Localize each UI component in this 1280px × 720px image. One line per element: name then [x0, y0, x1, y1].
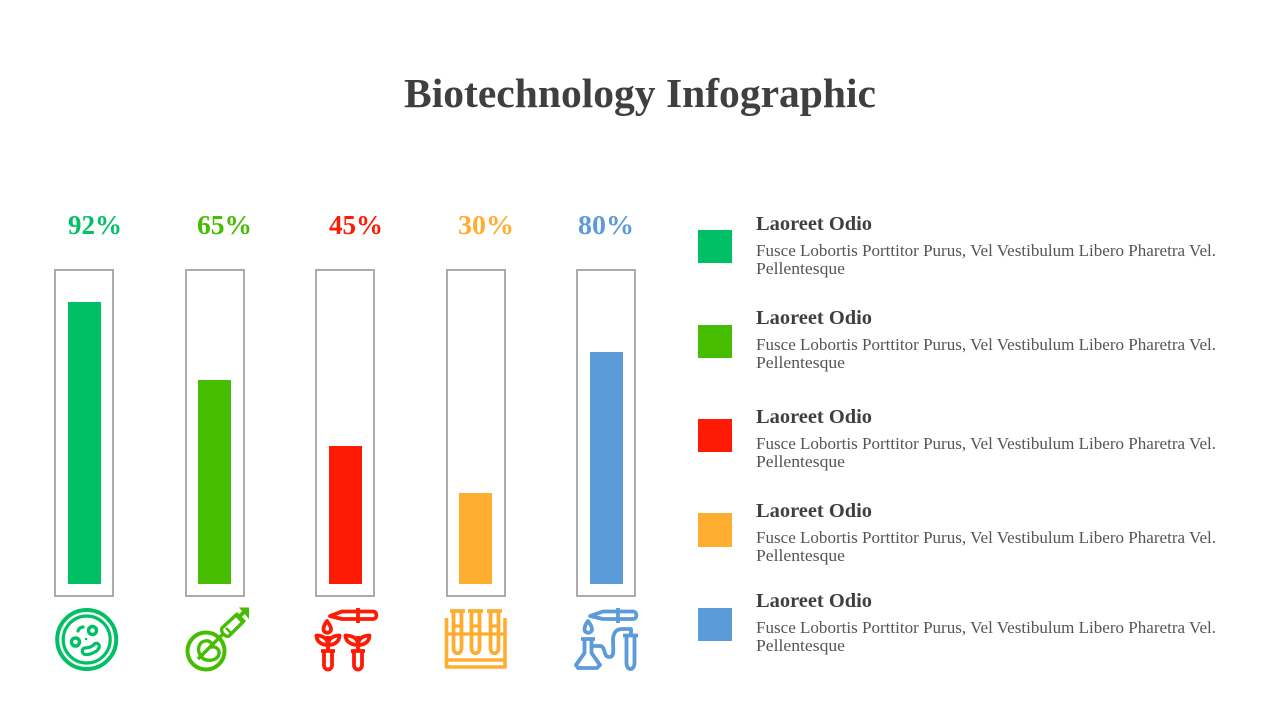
description: Fusce Lobortis Porttitor Purus, Vel Vestibulum Libero Pharetra Vel.	[756, 241, 1216, 260]
heading: Laoreet Odio	[756, 213, 872, 235]
icon: test tube rack	[446, 611, 505, 667]
legend item 3	[698, 406, 1216, 471]
icon: petri dish	[57, 610, 116, 669]
swatch	[698, 513, 732, 547]
heading: Laoreet Odio	[756, 590, 872, 612]
description: Fusce Lobortis Porttitor Purus, Vel Vestibulum Libero Pharetra Vel.	[756, 335, 1216, 354]
value: 92%: 92%	[68, 210, 122, 240]
bar frame and fill	[316, 270, 374, 596]
column: 65% lime	[186, 210, 252, 670]
description: Pellentesque	[756, 636, 845, 655]
heading: Laoreet Odio	[756, 500, 872, 522]
description: Pellentesque	[756, 353, 845, 372]
legend item 1	[698, 213, 1216, 278]
column: 80% blue	[576, 210, 638, 669]
description: Fusce Lobortis Porttitor Purus, Vel Vestibulum Libero Pharetra Vel.	[756, 528, 1216, 547]
bar frame and fill	[577, 270, 635, 596]
heading: Laoreet Odio	[756, 307, 872, 329]
swatch	[698, 325, 732, 358]
bar frame and fill	[55, 270, 113, 596]
description	[756, 241, 1216, 278]
swatch	[698, 608, 732, 641]
swatch	[698, 230, 732, 263]
description	[756, 335, 1216, 372]
bar frame and fill	[447, 270, 505, 596]
column: 92% green	[55, 210, 122, 669]
icon: syringe and cell	[188, 608, 249, 670]
value: 30%: 30%	[458, 210, 514, 240]
column: 30% orange	[446, 210, 514, 667]
description	[756, 528, 1216, 565]
legend item 5	[698, 590, 1216, 655]
icon: flask and dropper	[576, 608, 638, 669]
title: Biotechnology Infographic	[404, 70, 876, 116]
value: 45%: 45%	[329, 210, 383, 240]
description	[756, 618, 1216, 655]
value: 65%: 65%	[197, 210, 252, 240]
legend item 2	[698, 307, 1216, 372]
description: Fusce Lobortis Porttitor Purus, Vel Vestibulum Libero Pharetra Vel.	[756, 618, 1216, 637]
icon: dropper and plants	[316, 608, 376, 670]
value: 80%: 80%	[578, 210, 634, 240]
heading: Laoreet Odio	[756, 406, 872, 428]
swatch	[698, 419, 732, 452]
description: Pellentesque	[756, 452, 845, 471]
legend item 4	[698, 500, 1216, 565]
description: Pellentesque	[756, 546, 845, 565]
description: Pellentesque	[756, 259, 845, 278]
bar frame and fill	[186, 270, 244, 596]
description: Fusce Lobortis Porttitor Purus, Vel Vestibulum Libero Pharetra Vel.	[756, 434, 1216, 453]
description	[756, 434, 1216, 471]
column: 45% red	[316, 210, 383, 670]
